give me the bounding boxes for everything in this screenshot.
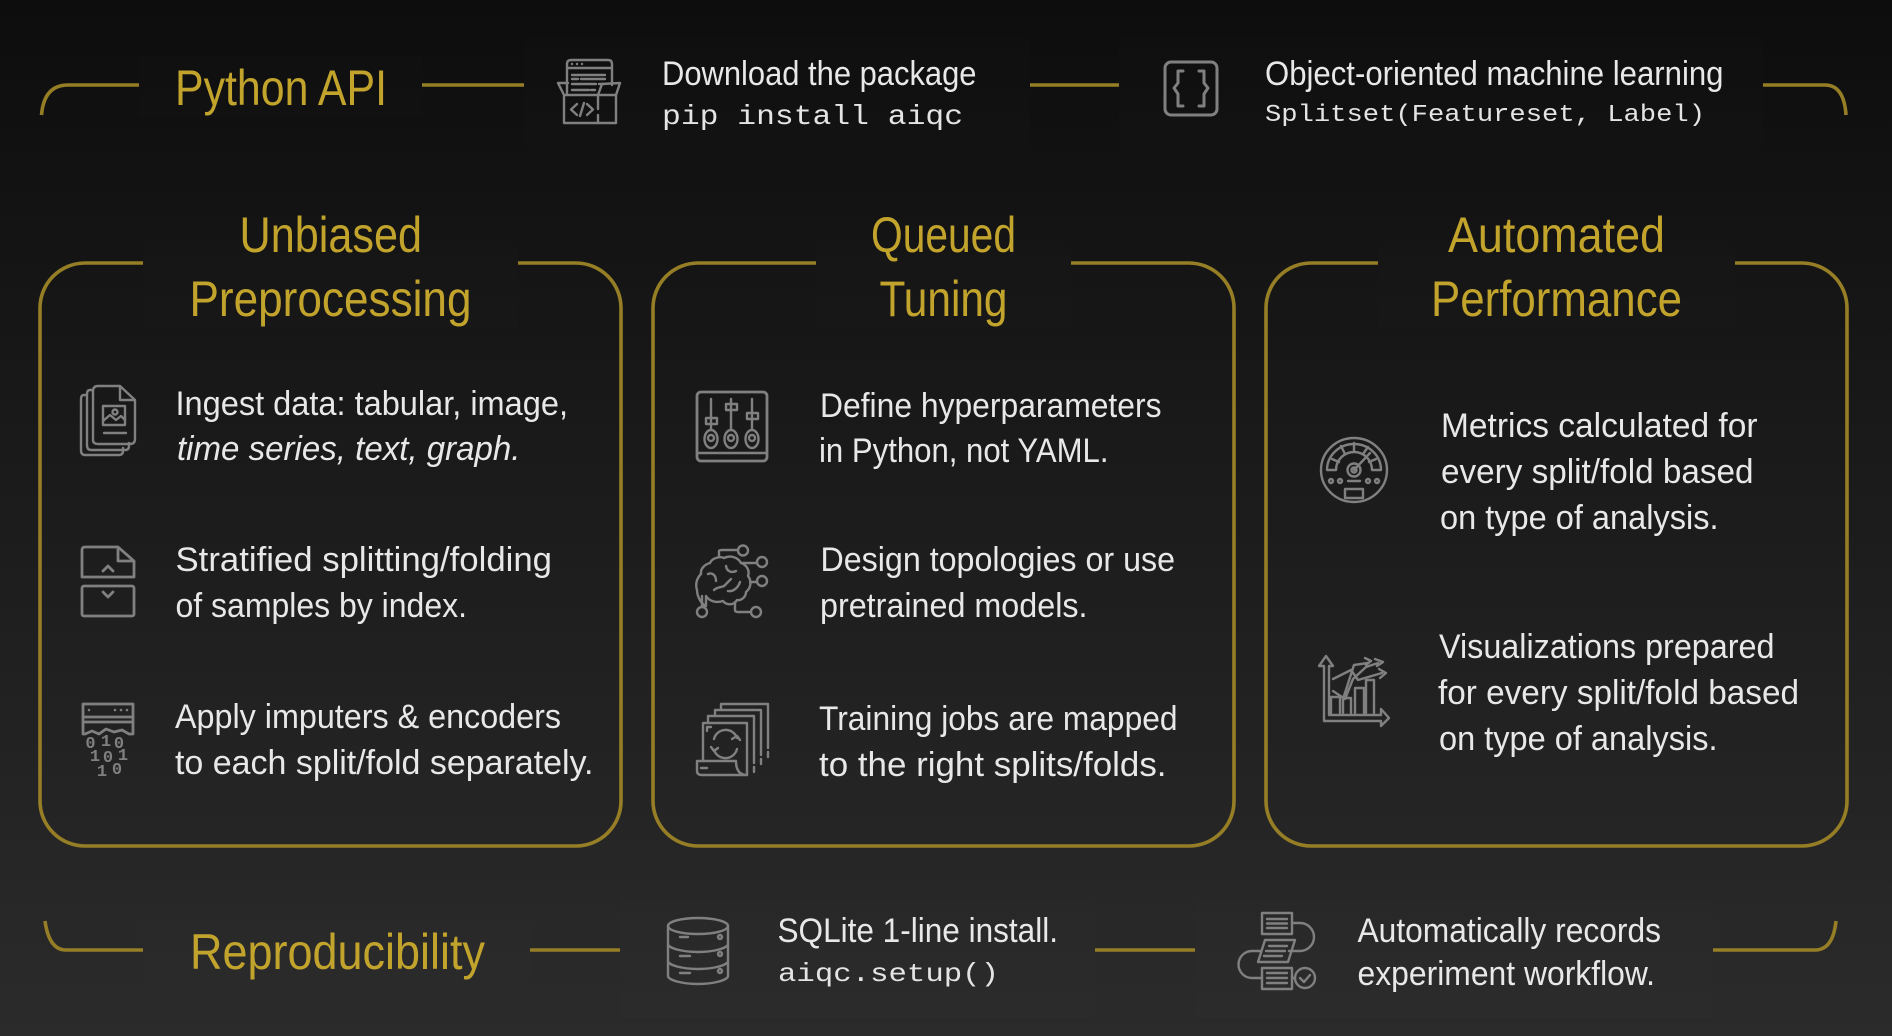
text: stratified splitting: Stratified splitting/folding bbox=[176, 541, 552, 579]
text: training jobs bbox=[819, 700, 1178, 784]
text: training jobs: to the right splits/folds. bbox=[819, 746, 1166, 784]
icon: stacked jobs bbox=[697, 704, 768, 775]
plate: Reproducibility bbox=[143, 921, 530, 990]
heading plate bbox=[143, 241, 518, 327]
text: define hyperparameters bbox=[819, 387, 1162, 470]
heading: Queued Tuning: Queued bbox=[871, 207, 1016, 263]
text: ingest data: time series, text, graph. bbox=[177, 430, 520, 468]
text: visualizations prepared: on type of analysis. bbox=[1439, 720, 1718, 758]
panel: Automated Performance bbox=[1266, 207, 1847, 846]
text: apply imputers: Apply imputers & encoders bbox=[175, 698, 561, 736]
band: Python API bbox=[42, 38, 1846, 145]
text: SQLite install: SQLite 1-line install. bbox=[778, 912, 1058, 950]
plate: workflow bbox=[1195, 898, 1713, 1018]
icon: brain network bbox=[696, 546, 767, 617]
text: metrics calculated: on type of analysis. bbox=[1440, 499, 1718, 537]
text: visualizations prepared: for every split/fold based bbox=[1438, 674, 1799, 712]
heading plate bbox=[816, 241, 1071, 327]
code: aiqc.setup(): aiqc.setup() bbox=[778, 959, 999, 989]
icon: sliders bbox=[697, 392, 767, 461]
heading: Automated Performance bbox=[1431, 207, 1682, 327]
panel frame bbox=[653, 263, 1234, 846]
icon: image files bbox=[81, 386, 135, 455]
icon: shredder: 0 bbox=[114, 735, 124, 754]
text: design topologies bbox=[820, 541, 1175, 625]
icon: shredder: 1 bbox=[90, 748, 100, 767]
text: object-oriented machine learning: Object-oriented machine learning bbox=[1265, 55, 1724, 93]
icon: shredder: 1 bbox=[101, 733, 111, 752]
text: ingest data bbox=[176, 385, 568, 468]
icon: shredder: 0 bbox=[112, 761, 122, 780]
text: automatically records: experiment workflow. bbox=[1358, 955, 1655, 993]
text: download the package: Download the package bbox=[662, 55, 976, 93]
text: ingest data: Ingest data: tabular, image, bbox=[176, 385, 568, 423]
plate: SQLite bbox=[620, 898, 1095, 1018]
icon: chart with trend arrows bbox=[1319, 656, 1389, 726]
heading: Python API: Python API bbox=[175, 60, 387, 116]
connector lines: bottom band bbox=[45, 921, 1836, 950]
heading: Unbiased Preprocessing: Preprocessing bbox=[190, 271, 472, 327]
text: visualizations prepared bbox=[1438, 628, 1799, 758]
icon: curly braces bbox=[1165, 62, 1217, 115]
icon: package box bbox=[558, 60, 620, 123]
icon: shredder: 1 bbox=[97, 763, 107, 782]
text: design topologies: Design topologies or use bbox=[820, 541, 1175, 579]
text: apply imputers bbox=[175, 698, 594, 782]
text: stratified splitting: of samples by index. bbox=[176, 587, 467, 625]
panel frame bbox=[40, 263, 621, 846]
heading: Queued Tuning bbox=[871, 207, 1016, 327]
heading: Queued Tuning: Tuning bbox=[880, 271, 1008, 327]
icon: shredder: 1 bbox=[118, 747, 128, 766]
heading plate bbox=[1378, 241, 1735, 327]
icon: database bbox=[668, 918, 728, 984]
icon: gauge bbox=[1321, 438, 1387, 502]
icon: shredder bbox=[83, 704, 133, 782]
code: Splitset: Splitset(Featureset, Label) bbox=[1265, 102, 1705, 129]
text: define hyperparameters: Define hyperparameters bbox=[820, 387, 1162, 425]
icon: shredder: 0 bbox=[85, 735, 96, 754]
panel: Unbiased Preprocessing bbox=[40, 207, 621, 846]
text: design topologies: pretrained models. bbox=[820, 587, 1088, 625]
text: metrics calculated bbox=[1440, 407, 1758, 537]
panel frame bbox=[1266, 263, 1847, 846]
code: pip install aiqc: pip install aiqc bbox=[662, 102, 963, 133]
icon: split file bbox=[82, 547, 134, 616]
connector lines: top band bbox=[42, 85, 1846, 115]
text: stratified splitting bbox=[176, 541, 552, 625]
heading: Reproducibility: Reproducibility bbox=[190, 924, 485, 980]
text: training jobs: Training jobs are mapped bbox=[819, 700, 1178, 738]
text: define hyperparameters: in Python, not YAML. bbox=[819, 432, 1108, 470]
heading: Unbiased Preprocessing: Unbiased bbox=[240, 207, 422, 263]
text: apply imputers: to each split/fold separately. bbox=[175, 744, 594, 782]
text: visualizations prepared: Visualizations prepared bbox=[1439, 628, 1774, 666]
plate: Python API bbox=[139, 56, 422, 117]
band: Reproducibility bbox=[45, 898, 1836, 1018]
icon: workflow bbox=[1238, 913, 1315, 989]
text: metrics calculated: Metrics calculated for bbox=[1441, 407, 1758, 445]
heading: Unbiased Preprocessing bbox=[190, 207, 472, 327]
plate: download bbox=[524, 38, 1030, 145]
text: automatically records bbox=[1358, 912, 1661, 993]
text: metrics calculated: every split/fold based bbox=[1441, 453, 1754, 491]
heading: Automated Performance: Automated bbox=[1448, 207, 1665, 263]
plate: object-oriented bbox=[1119, 38, 1763, 145]
text: automatically records: Automatically records bbox=[1358, 912, 1661, 950]
panel: Queued Tuning bbox=[653, 207, 1234, 846]
heading: Automated Performance: Performance bbox=[1431, 271, 1682, 327]
icon: shredder: 0 bbox=[103, 749, 113, 768]
